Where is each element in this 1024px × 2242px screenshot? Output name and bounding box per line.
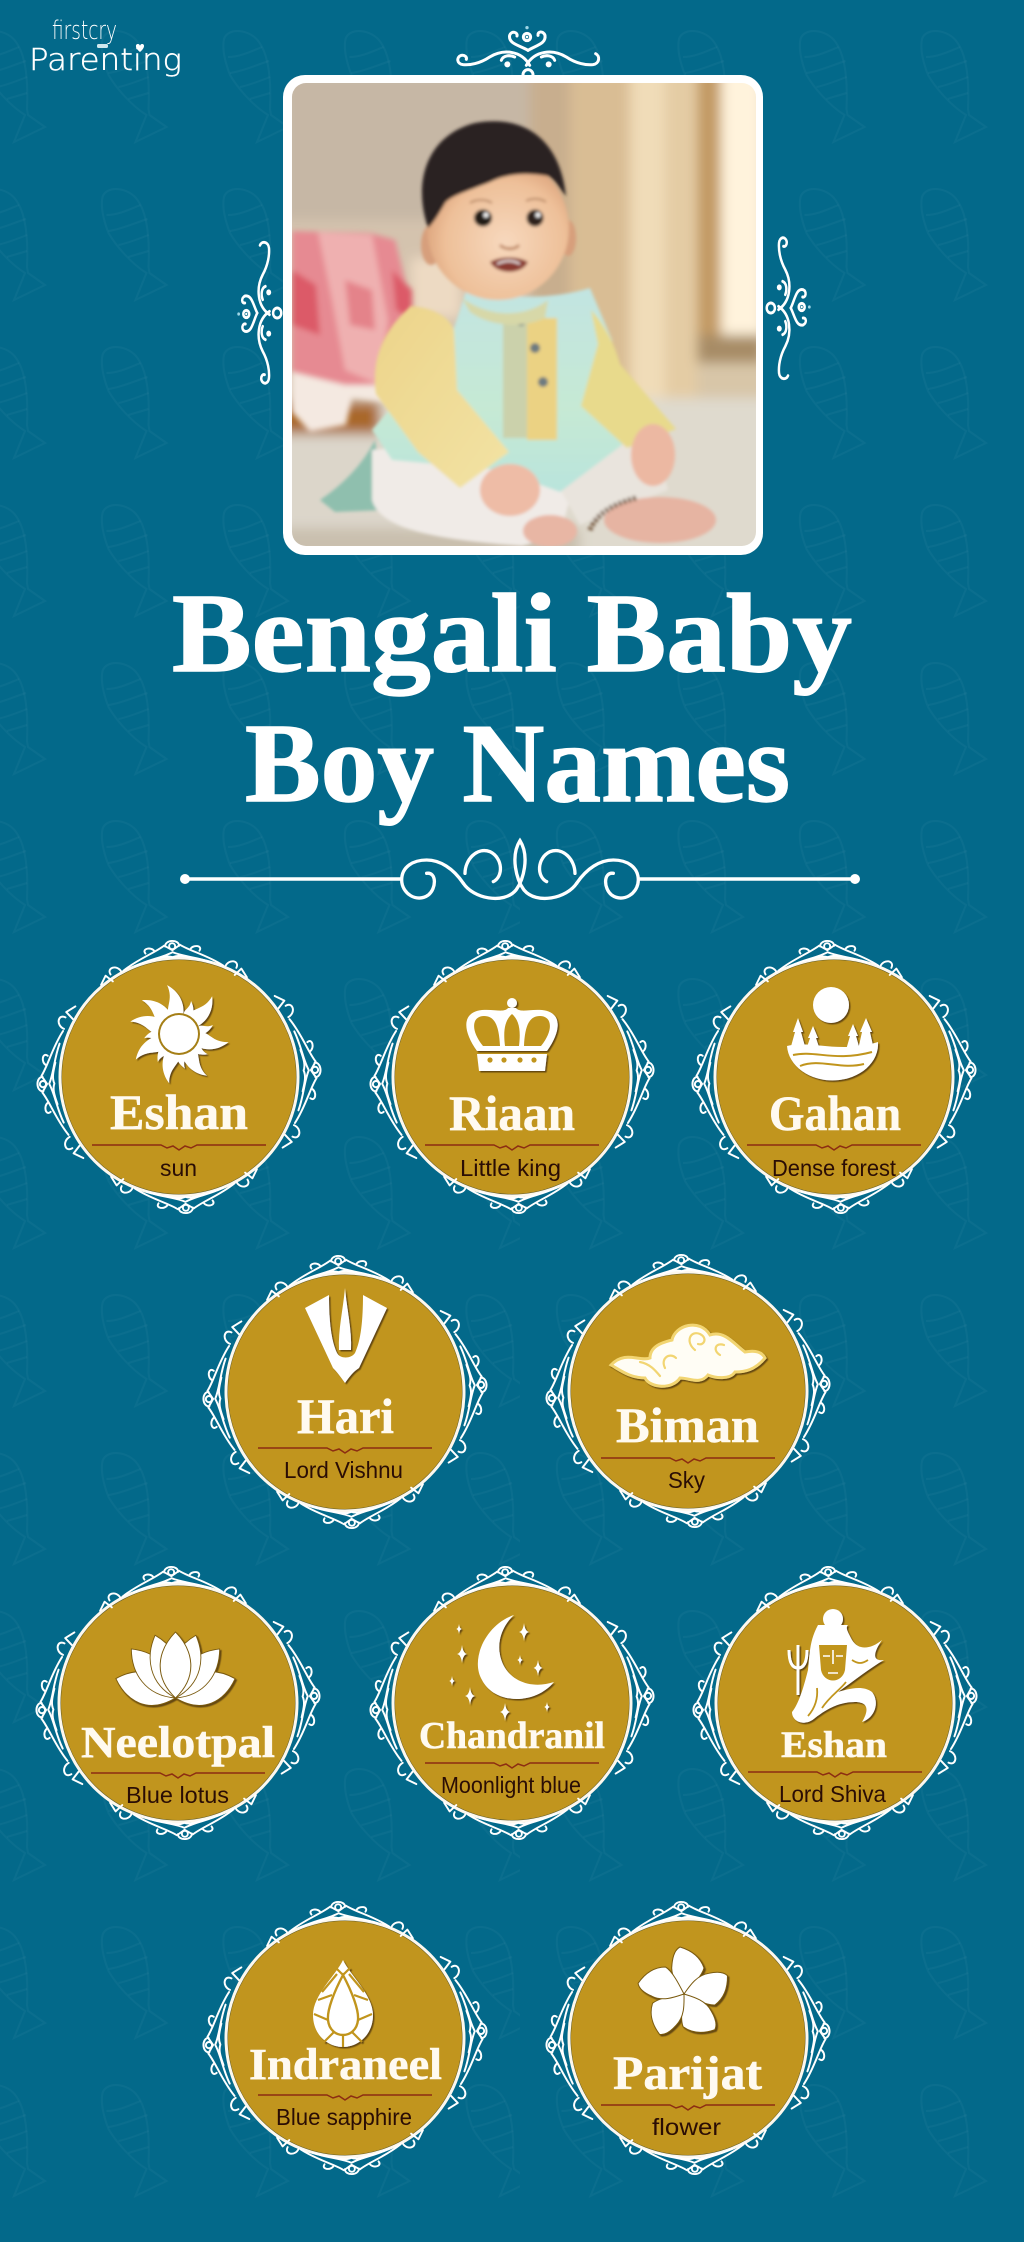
ornament: left flourish [237,242,281,383]
medallion: Neelotpal lotus [29,1560,327,1846]
medallion: Chandranil moon [363,1560,661,1846]
medallion frame [29,1560,327,1846]
photo frame [283,75,763,555]
hair [422,121,566,228]
medallion frame [685,934,983,1220]
trousers [372,440,575,546]
medallion frame [196,1895,494,2181]
name: Biman [616,1397,759,1453]
medallion: Eshan Shiva [686,1560,984,1846]
name: Eshan [110,1084,248,1140]
meaning: sun [160,1155,197,1181]
medallion frame [686,1560,984,1846]
divider line [601,1458,775,1463]
medallion frame [196,1249,494,1535]
meaning: Moonlight blue [441,1772,581,1798]
medallion frame [30,934,328,1220]
divider line [425,1763,599,1768]
kurta body [372,285,622,492]
icon: moon over forest [787,987,878,1080]
bootie [320,440,385,512]
divider line [748,1772,922,1777]
divider line [601,2105,775,2110]
icon: cloud [611,1325,765,1386]
meaning: Lord Shiva [779,1781,886,1807]
title: Boy Names [245,702,790,826]
medallion: Riaan crown [363,934,661,1220]
ornament: right flourish [767,238,811,379]
name: Parijat [613,2047,762,2100]
logo: FirstCry Parenting: Parenting [29,43,182,78]
medallion frame [363,1560,661,1846]
medallion: Eshan sun [30,934,328,1220]
medallion: Gahan forest [685,934,983,1220]
logo: FirstCry Parenting: firstcry [52,16,117,46]
name: Gahan [769,1085,901,1141]
feet [604,497,716,543]
head [420,227,437,266]
icon: parijat flower [635,1947,735,2044]
face [474,210,492,226]
icon: lotus [111,1631,240,1713]
name: Chandranil [419,1715,605,1757]
icon: Lord Shiva with trident [789,1609,884,1723]
medallion: Hari tilak [196,1249,494,1535]
medallion frame [539,1895,837,2181]
divider line [91,1773,265,1778]
divider line [92,1145,266,1150]
medallion: Parijat flower [539,1895,837,2181]
title: Bengali Baby [172,572,852,696]
icon: sun [129,983,229,1084]
meaning: Lord Vishnu [284,1457,403,1483]
hands [480,464,540,516]
icon: Vishnu tilak [305,1288,387,1383]
icon: crescent moon and stars [449,1615,554,1721]
ornament: top flourish [458,26,599,80]
name: Eshan [781,1725,887,1766]
meaning: Blue lotus [126,1782,229,1808]
logo: FirstCry Parenting [29,16,182,78]
name: Hari [297,1388,394,1444]
name: Riaan [449,1085,575,1141]
divider line [747,1145,921,1150]
meaning: Blue sapphire [276,2104,412,2130]
medallion: Biman cloud [539,1248,837,1534]
blanket [292,228,408,387]
icon: crown [466,998,558,1071]
photo: smiling baby in kurta [292,83,756,546]
medallion: Indraneel sapphire [196,1895,494,2181]
title [172,572,852,826]
divider flourish [180,841,860,898]
divider line [425,1145,599,1150]
placket [503,318,531,438]
icon: sapphire gem [313,1960,373,2047]
divider line [258,1448,432,1453]
meaning: Sky [668,1467,705,1493]
collar [462,298,548,325]
divider line [258,2095,432,2100]
sleeves [375,306,509,488]
meaning: Dense forest [772,1155,897,1181]
medallion frame [363,934,661,1220]
name: Indraneel [249,2040,442,2089]
meaning: Little king [460,1155,561,1181]
medallion frame [539,1248,837,1534]
meaning: flower [652,2114,721,2140]
name: Neelotpal [81,1718,275,1767]
